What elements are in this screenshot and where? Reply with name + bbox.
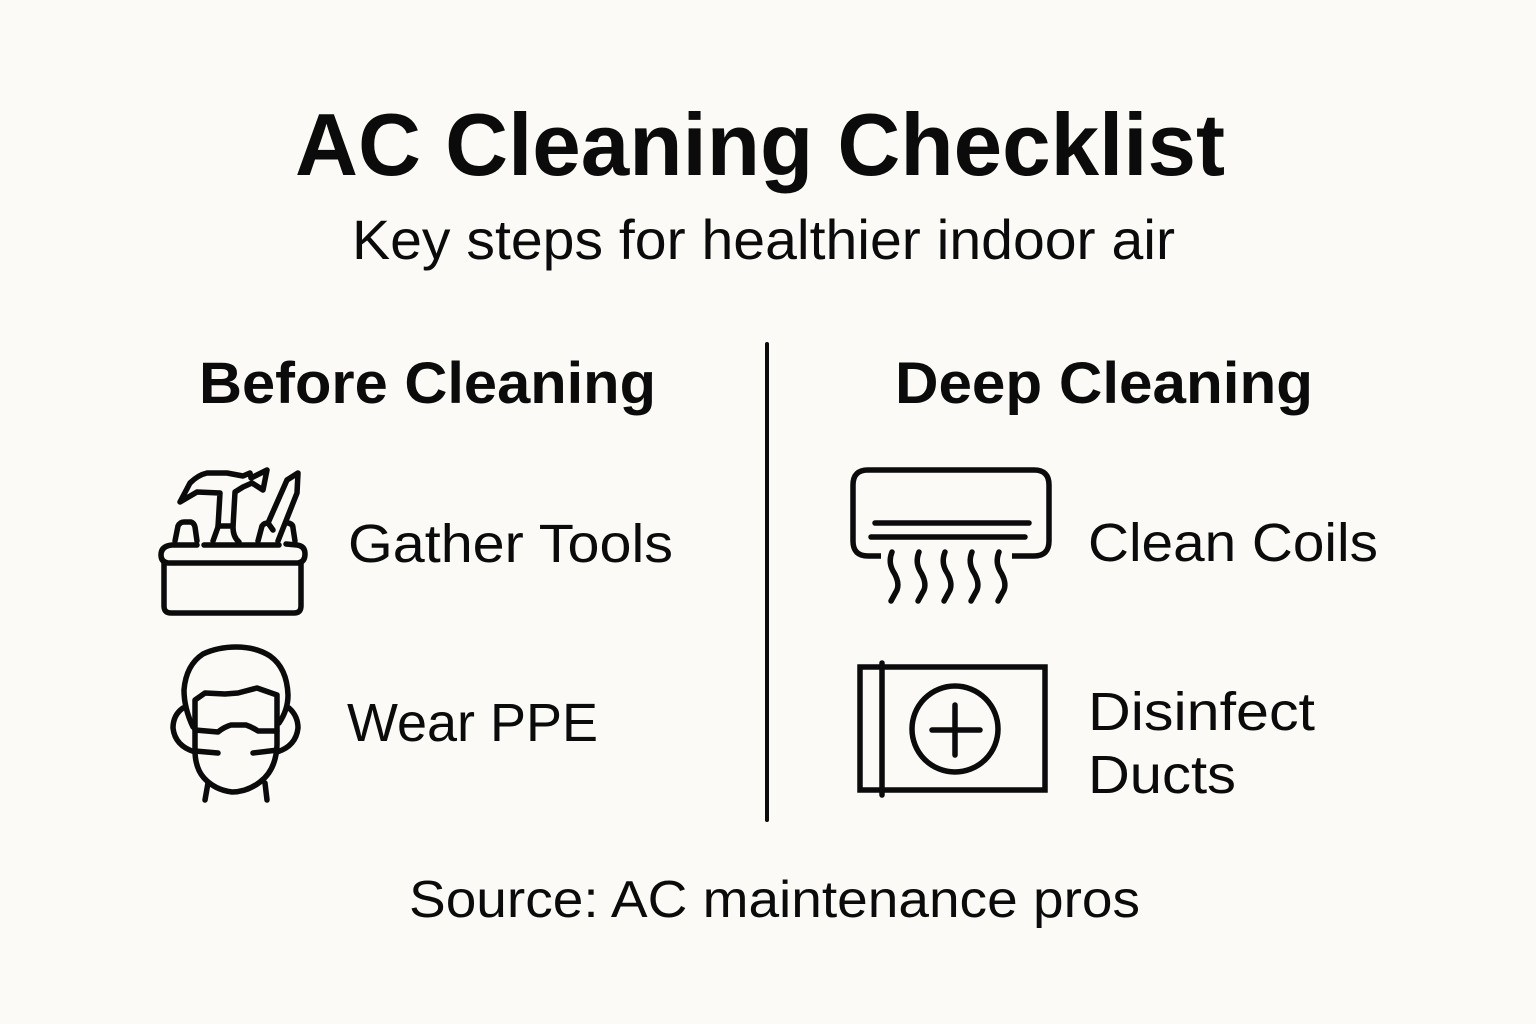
divider <box>765 344 769 820</box>
panel: before cleaning <box>161 351 673 800</box>
label: clean coils: Clean Coils <box>1088 513 1378 573</box>
label: disinfect ducts <box>1088 682 1315 805</box>
label: disinfect ducts: Disinfect <box>1088 682 1315 742</box>
label: disinfect ducts: Ducts <box>1088 745 1236 805</box>
icon: toolbox <box>161 470 305 613</box>
source note: Source: AC maintenance pros <box>409 871 1140 929</box>
title: AC Cleaning Checklist <box>295 95 1225 194</box>
icon: air conditioner <box>853 470 1049 601</box>
heading: deep cleaning: Deep Cleaning <box>895 351 1313 416</box>
panel: deep cleaning <box>853 351 1378 805</box>
icon: face with mask <box>173 647 298 800</box>
icon: duct with plus <box>860 663 1045 795</box>
subtitle: Key steps for healthier indoor air <box>352 208 1175 271</box>
label: wear ppe: Wear PPE <box>347 693 598 753</box>
label: gather tools: Gather Tools <box>348 514 673 574</box>
heading: before cleaning: Before Cleaning <box>199 351 656 416</box>
